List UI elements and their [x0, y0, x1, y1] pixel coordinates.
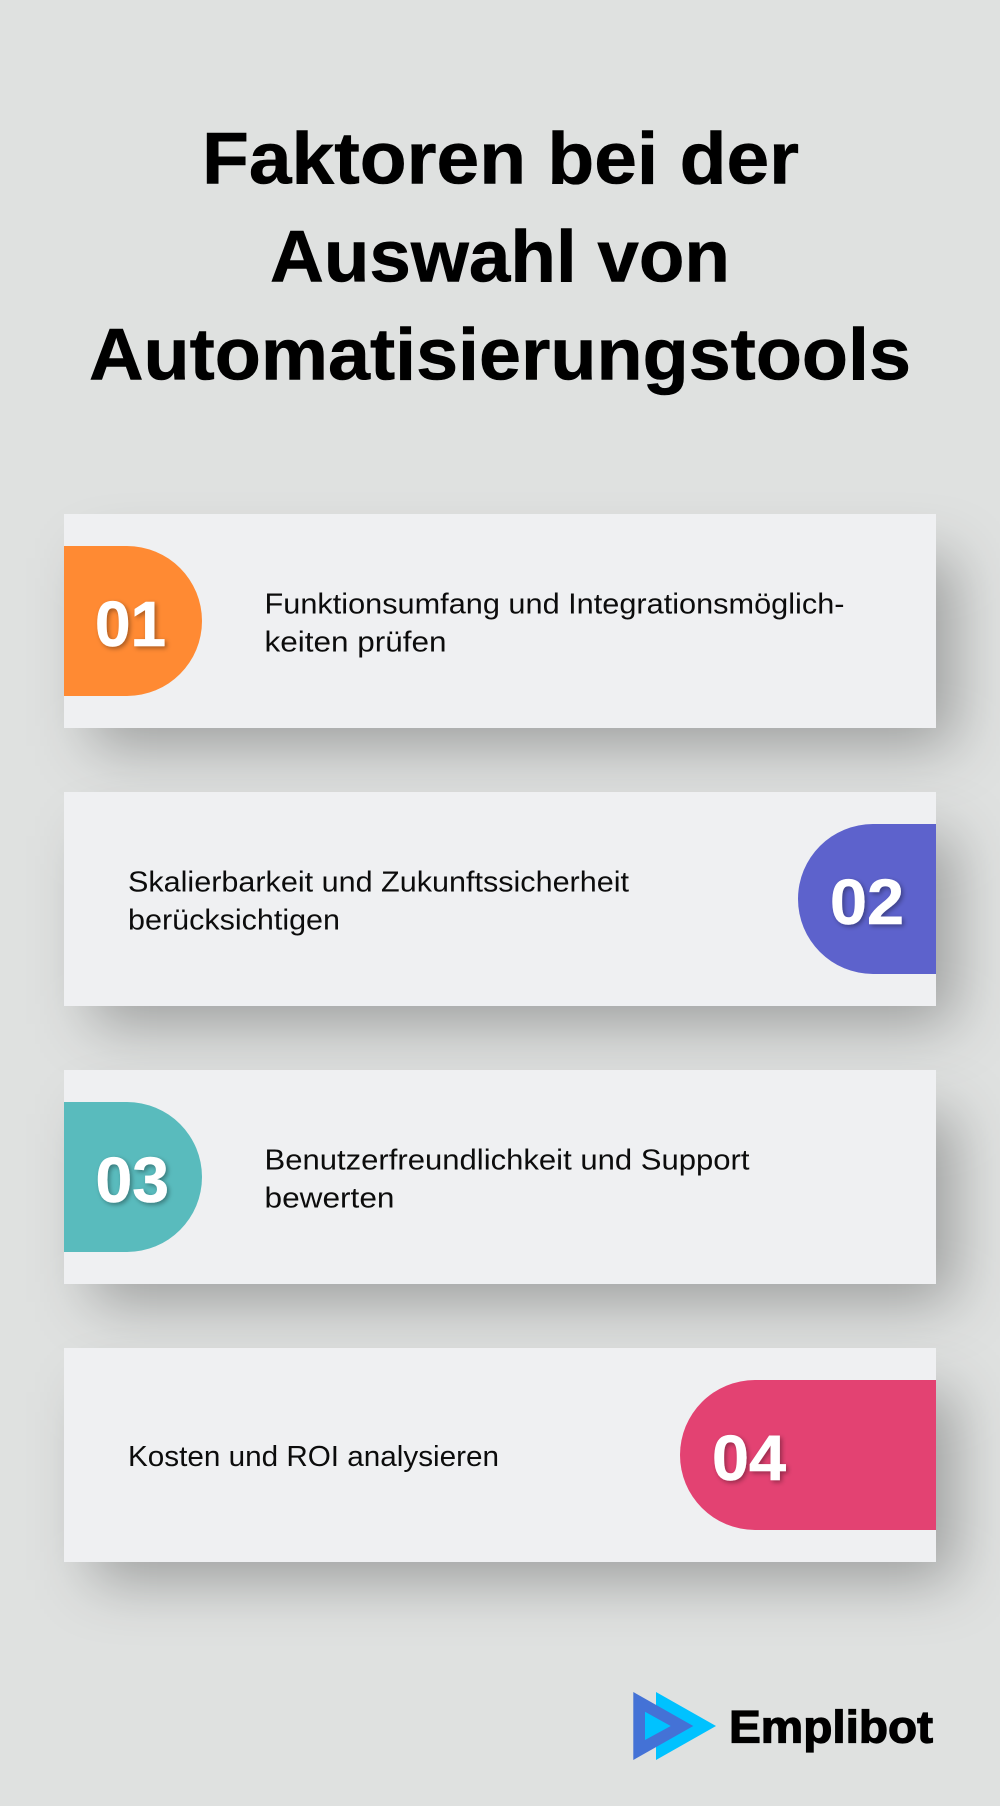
badge: purple pill	[798, 824, 936, 974]
panel: factor 04	[64, 1348, 954, 1580]
text: factor 01	[264, 588, 844, 658]
icon: play triangles	[633, 1692, 716, 1760]
number 03: 03	[96, 1144, 169, 1216]
text: factor 04: Kosten und ROI analysieren	[128, 1441, 499, 1473]
number 04: 04	[712, 1422, 786, 1494]
text: factor 03	[264, 1144, 750, 1214]
text: factor 02: Skalierbarkeit und Zukunftssicherheit	[128, 866, 629, 898]
logo: Emplibot	[633, 1692, 933, 1760]
text: factor 03: bewerten	[264, 1182, 394, 1214]
text: factor 02	[128, 866, 629, 936]
panel: factor 03	[64, 1070, 954, 1302]
badge: pink pill	[680, 1380, 936, 1530]
text: factor 03: Benutzerfreundlichkeit und Support	[264, 1144, 750, 1176]
number 01: 01	[95, 588, 166, 660]
title	[89, 118, 911, 396]
title: Auswahl von	[270, 216, 730, 298]
panel: factor 02	[64, 792, 954, 1024]
panel: factor 01	[64, 514, 954, 746]
text: factor 02: berücksichtigen	[128, 904, 340, 936]
title: Faktoren bei der	[202, 118, 799, 200]
wordmark: Emplibot	[729, 1702, 933, 1753]
text: factor 01: keiten prüfen	[264, 626, 446, 658]
text: factor 01: Funktionsumfang und Integrationsmöglich-	[264, 588, 844, 620]
number 02: 02	[830, 866, 904, 938]
badge: orange pill	[64, 546, 202, 696]
badge: teal pill	[64, 1102, 202, 1252]
title: Automatisierungstools	[89, 314, 911, 396]
